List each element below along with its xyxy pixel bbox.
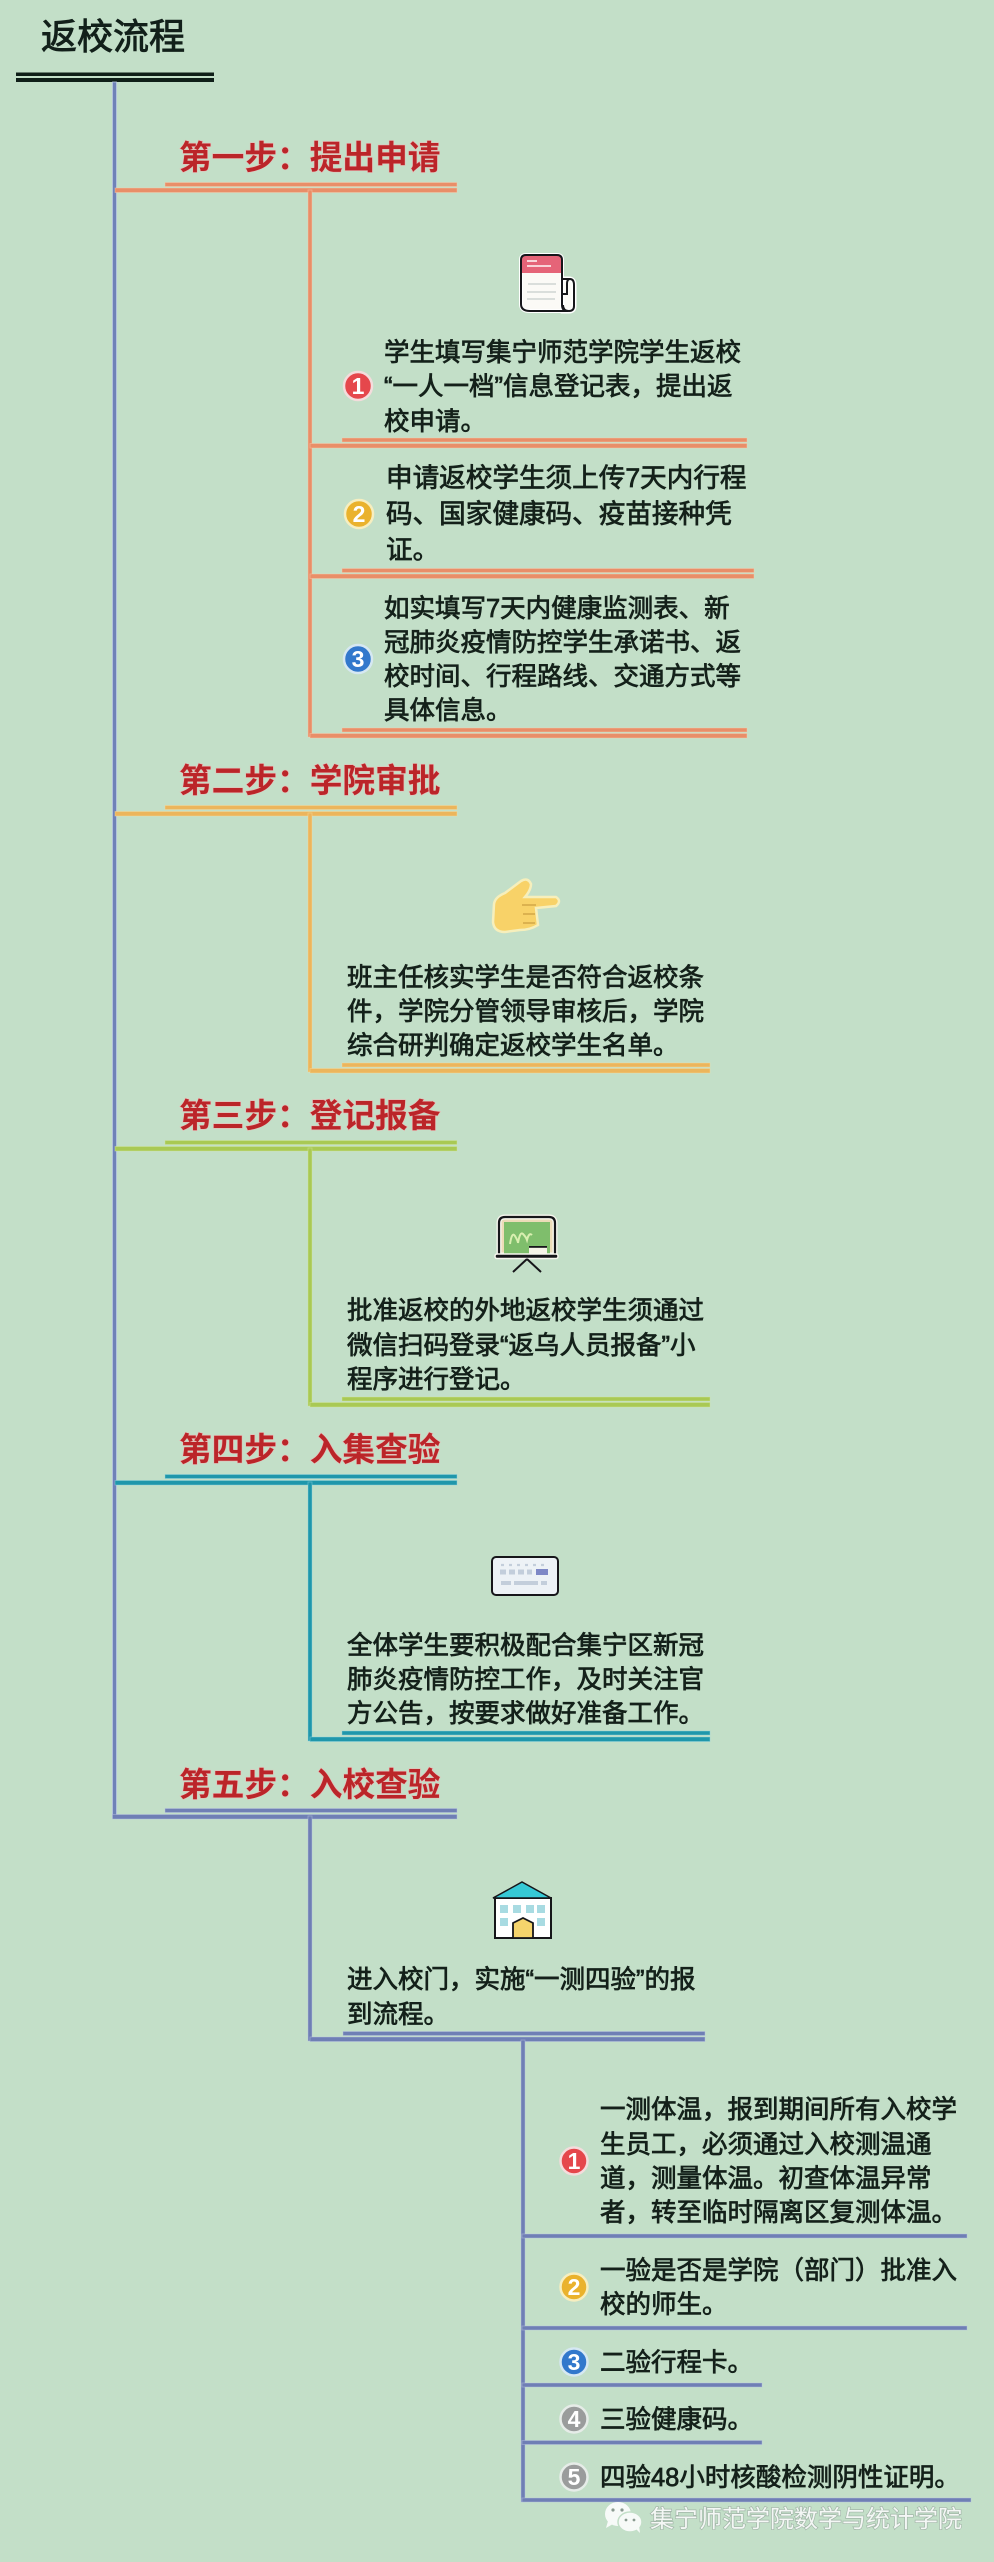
sub badge 5 — [560, 2464, 588, 2490]
watermark — [605, 2502, 962, 2533]
step 1 heading: 第一步：提出申请 — [179, 139, 440, 176]
icon: blackboard — [495, 1217, 558, 1272]
badge 2: 2 — [353, 501, 365, 527]
step 5 text: 进入校门，实施“一测四验”的报 — [347, 1966, 695, 1994]
sub badge 1 — [560, 2148, 588, 2174]
step 3 text: 批准返校的外地返校学生须通过 — [347, 1297, 704, 1325]
step 5 connectors — [112, 1808, 971, 2502]
title: 返校流程: 返校流程 — [41, 16, 185, 57]
badge 3 — [344, 645, 372, 673]
item 1 — [344, 339, 741, 436]
step 3 heading: 第三步：登记报备 — [179, 1097, 441, 1134]
step 4 connectors — [115, 1474, 710, 1742]
panel: step 3 — [115, 1097, 710, 1407]
step 3 connectors — [115, 1140, 710, 1407]
icon: pointing hand — [493, 880, 559, 932]
item 2 text: 证。 — [386, 535, 439, 565]
item 2 — [345, 463, 747, 565]
badge 1: 1 — [352, 373, 365, 399]
badge 2 — [345, 500, 373, 528]
step 4 text: 全体学生要积极配合集宁区新冠 — [347, 1632, 704, 1660]
step 3 text: 微信扫码登录“返乌人员报备”小 — [347, 1332, 695, 1360]
sub badge 4: 4 — [568, 2406, 581, 2432]
item 2 text: 申请返校学生须上传7天内行程 — [386, 463, 747, 493]
sub item 4 — [560, 2406, 753, 2434]
icon: keyboard — [492, 1557, 558, 1595]
item 2 text: 码、国家健康码、疫苗接种凭 — [386, 499, 732, 529]
panel: step 2 — [115, 762, 710, 1073]
step 2 text: 件，学院分管领导审核后，学院 — [347, 998, 704, 1026]
step 4 text: 肺炎疫情防控工作，及时关注官 — [347, 1666, 704, 1694]
sub badge 3 — [560, 2348, 588, 2376]
icon: newspaper document — [521, 255, 574, 311]
item 3 — [344, 595, 741, 725]
sub item 1 — [560, 2096, 957, 2227]
step 5 text: 到流程。 — [347, 2001, 449, 2029]
sub item 1 text: 一测体温，报到期间所有入校学 — [600, 2096, 957, 2124]
item 3 text: 校时间、行程路线、交通方式等 — [384, 663, 741, 691]
watermark text: 集宁师范学院数学与统计学院 — [650, 2506, 962, 2533]
sub item 2 text: 一验是否是学院（部门）批准入 — [600, 2257, 957, 2285]
sub item 1 text: 道，测量体温。初查体温异常 — [600, 2165, 932, 2193]
item 3 text: 冠肺炎疫情防控学生承诺书、返 — [384, 629, 741, 657]
sub badge 1: 1 — [568, 2148, 581, 2174]
panel: step 5 — [112, 1766, 971, 2502]
item 1 text: 学生填写集宁师范学院学生返校 — [384, 339, 741, 367]
step 3 text: 程序进行登记。 — [347, 1366, 526, 1394]
item 3 text: 如实填写7天内健康监测表、新 — [384, 595, 730, 623]
step 4 text: 方公告，按要求做好准备工作。 — [347, 1700, 704, 1728]
icon: school building — [493, 1882, 551, 1938]
sub item 2 — [560, 2257, 957, 2319]
sub item 2 text: 校的师生。 — [600, 2291, 728, 2319]
item 3 text: 具体信息。 — [384, 697, 512, 725]
icon: wechat — [605, 2502, 642, 2533]
step 2 text: 综合研判确定返校学生名单。 — [347, 1032, 679, 1060]
item 1 text: “一人一档”信息登记表，提出返 — [384, 373, 732, 401]
sub item 4 text: 三验健康码。 — [600, 2406, 753, 2434]
sub item 3 text: 二验行程卡。 — [600, 2349, 753, 2377]
step 1 connectors — [115, 182, 754, 738]
step 2 connectors — [115, 806, 710, 1073]
step 2 heading: 第二步：学院审批 — [179, 762, 440, 799]
step 4 heading: 第四步：入集查验 — [179, 1431, 441, 1468]
badge 1 — [344, 372, 372, 400]
step 2 text: 班主任核实学生是否符合返校条 — [347, 964, 704, 992]
panel: step 4 — [115, 1431, 710, 1742]
sub item 5 text: 四验48小时核酸检测阴性证明。 — [600, 2464, 960, 2492]
sub item 5 — [560, 2464, 960, 2492]
title: 返校流程 — [16, 16, 214, 82]
sub badge 2: 2 — [568, 2274, 580, 2300]
badge 3: 3 — [352, 646, 364, 672]
sub item 3 — [560, 2348, 753, 2377]
sub badge 5: 5 — [568, 2464, 581, 2490]
item 1 text: 校申请。 — [384, 408, 486, 436]
sub item 1 text: 生员工，必须通过入校测温通 — [600, 2131, 932, 2159]
step 5 heading: 第五步：入校查验 — [179, 1766, 441, 1803]
main trunk line — [112, 82, 116, 1818]
sub item 1 text: 者，转至临时隔离区复测体温。 — [600, 2199, 957, 2227]
panel: step 1 — [115, 139, 754, 738]
sub badge 2 — [560, 2274, 588, 2300]
sub badge 4 — [560, 2406, 588, 2432]
sub badge 3: 3 — [568, 2349, 580, 2375]
